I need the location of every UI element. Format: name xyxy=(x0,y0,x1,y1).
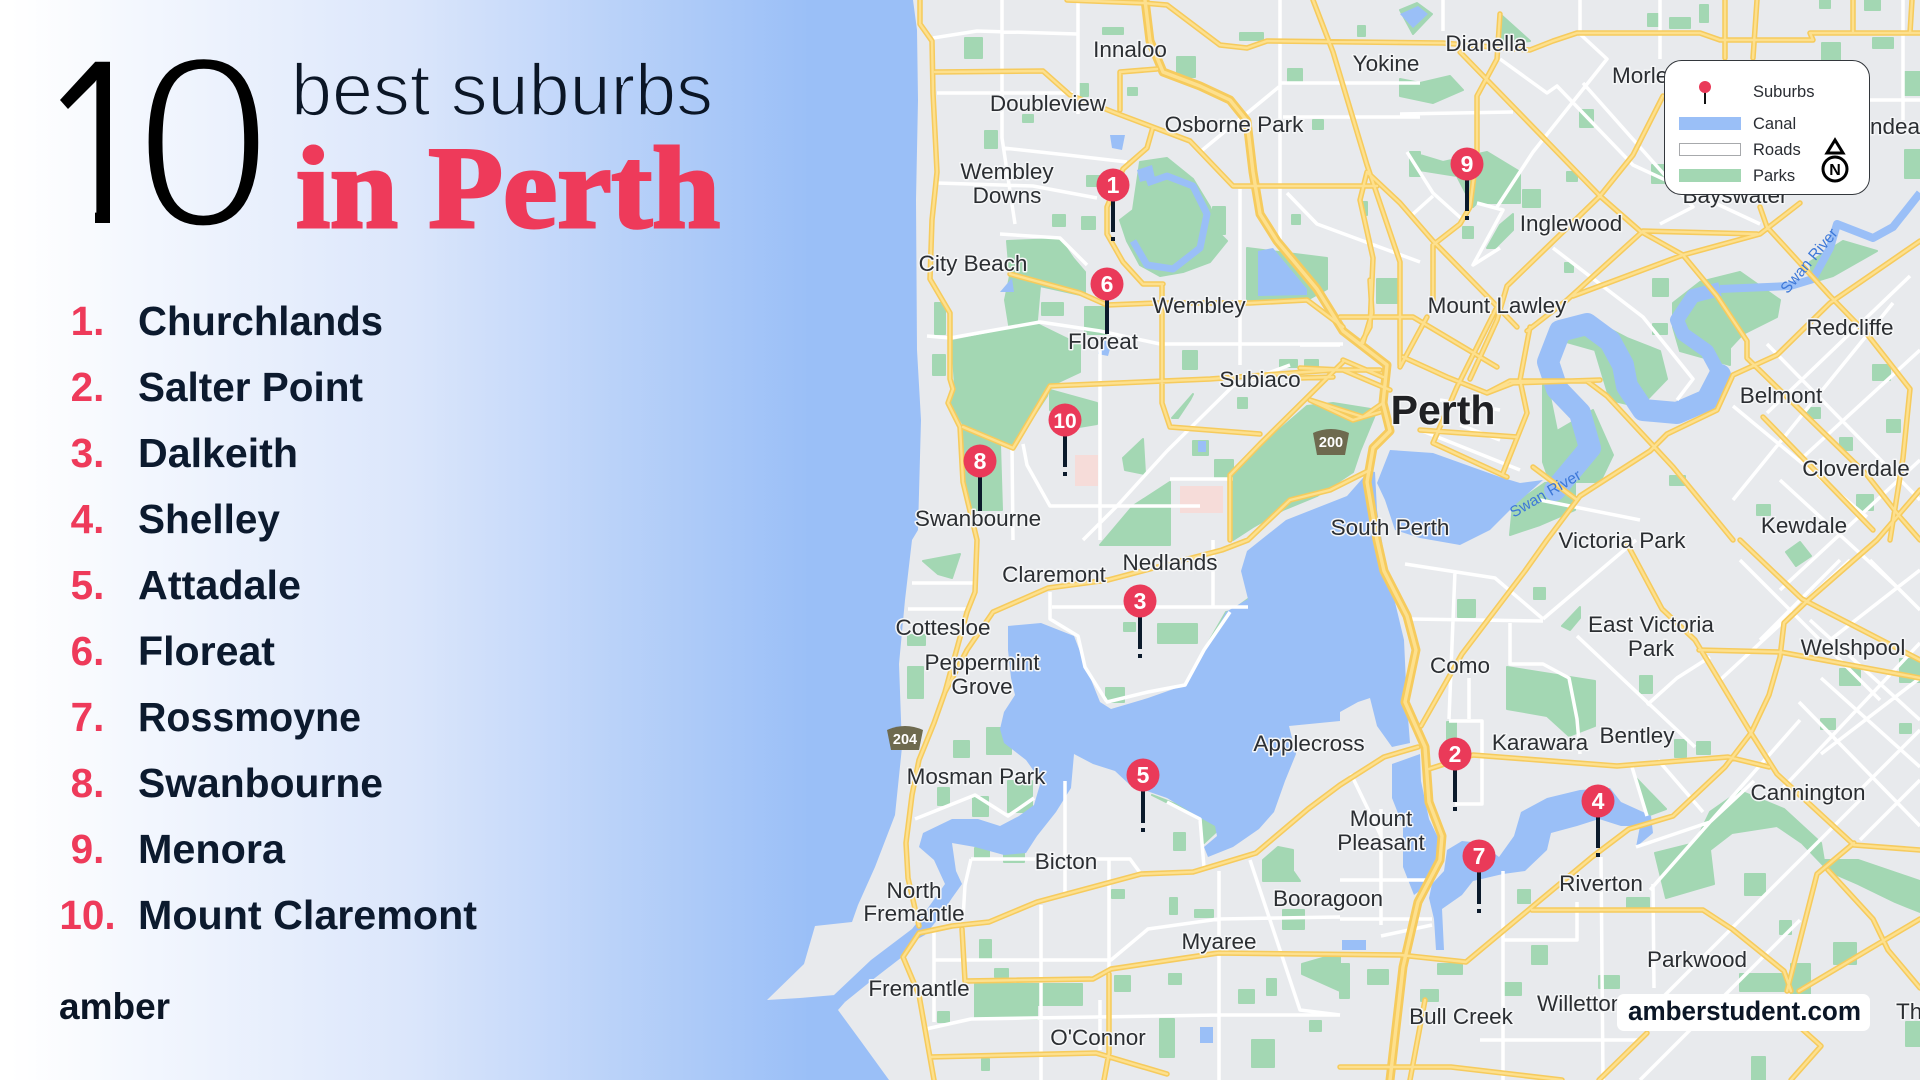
map place labels: Mount Lawley xyxy=(1428,293,1567,318)
pin 3 xyxy=(1124,584,1156,658)
map place labels: Myaree xyxy=(1181,929,1257,954)
legend: roads xyxy=(1680,141,1801,159)
pin 6: 6 xyxy=(1101,271,1113,297)
map place labels: Cloverdale xyxy=(1802,456,1910,481)
title number 10 xyxy=(60,59,258,226)
map place labels: Parkwood xyxy=(1647,947,1747,972)
map place labels: Redcliffe xyxy=(1806,315,1894,340)
map place labels: City Beach xyxy=(919,251,1027,276)
map place labels: Mosman Park xyxy=(907,764,1046,789)
water bodies xyxy=(834,6,1653,1043)
map place labels: Pleasant xyxy=(1337,830,1426,855)
pin 7 xyxy=(1462,840,1496,913)
highway shield 200: 200 xyxy=(1319,435,1343,451)
panel: legend xyxy=(1664,60,1870,194)
map place labels: Floreat xyxy=(1068,329,1139,354)
map place labels: Morley xyxy=(1612,63,1680,88)
legend: parks: Parks xyxy=(1753,167,1795,185)
map place labels: Riverton xyxy=(1559,871,1643,896)
pin 4 xyxy=(1582,784,1614,857)
map place labels: Park xyxy=(1628,636,1675,661)
list item 4 xyxy=(71,496,280,542)
map place labels: Bayswater xyxy=(1682,183,1788,208)
highway shield 204 xyxy=(887,726,923,750)
map place labels: Swanbourne xyxy=(915,506,1041,531)
list item 5: Attadale xyxy=(138,562,301,608)
list item 2: 2. xyxy=(71,364,104,410)
map place labels: Downs xyxy=(973,183,1041,208)
pin 1: 1 xyxy=(1107,172,1120,198)
map place labels: Bentley xyxy=(1599,723,1675,748)
legend: canal: Canal xyxy=(1753,115,1796,133)
pin 2: 2 xyxy=(1449,741,1461,767)
pin 7: 7 xyxy=(1473,843,1485,869)
website tag: amberstudent.com xyxy=(1628,996,1861,1026)
ranked suburb list xyxy=(59,298,477,938)
pin 1 xyxy=(1096,168,1130,241)
parks xyxy=(908,0,1920,1080)
white roads xyxy=(908,0,1920,1080)
map place labels: Cottesloe xyxy=(895,615,991,640)
list item 10: Mount Claremont xyxy=(138,892,477,938)
map place labels: Belmont xyxy=(1740,383,1823,408)
list item 9: Menora xyxy=(138,826,285,872)
map place labels: Cannington xyxy=(1750,780,1866,805)
map place labels: Applecross xyxy=(1253,731,1365,756)
pin 9: 9 xyxy=(1461,151,1473,177)
map place labels: East Victoria xyxy=(1588,612,1714,637)
list item 3 xyxy=(71,430,298,476)
pin 5 xyxy=(1126,758,1160,832)
list item 6: Floreat xyxy=(138,628,275,674)
list item 1: 1. xyxy=(71,298,104,344)
list item 3: Dalkeith xyxy=(138,430,298,476)
north arrow xyxy=(1823,140,1847,181)
legend: suburbs pin: Suburbs xyxy=(1753,83,1814,101)
title: in Perth: in Perth xyxy=(296,124,720,253)
map place labels: Bicton xyxy=(1035,849,1097,874)
list item 7: Rossmoyne xyxy=(138,694,361,740)
brand: amber: amber xyxy=(59,986,170,1027)
map place labels: Grove xyxy=(951,674,1013,699)
map place labels: Doubleview xyxy=(990,91,1107,116)
legend: canal xyxy=(1679,115,1796,133)
map place labels: Dianella xyxy=(1445,31,1527,56)
list item 5: 5. xyxy=(71,562,104,608)
pin 6 xyxy=(1090,268,1124,334)
list item 7: 7. xyxy=(71,694,104,740)
map place labels: Inglewood xyxy=(1520,211,1622,236)
map place labels: Claremont xyxy=(1002,562,1107,587)
map place labels: Mount xyxy=(1350,806,1413,831)
river label lower: Swan River xyxy=(1507,467,1584,521)
map place labels: Kewdale xyxy=(1761,513,1847,538)
north arrow: N xyxy=(1829,162,1841,179)
map place labels: Willetton xyxy=(1537,991,1623,1016)
map place labels: Wembley xyxy=(960,159,1054,184)
title: best suburbs: best suburbs xyxy=(291,50,713,131)
map place labels: Bull Creek xyxy=(1409,1004,1514,1029)
legend: parks xyxy=(1679,167,1795,185)
map place labels: Innaloo xyxy=(1093,37,1167,62)
pin 2 xyxy=(1438,738,1472,811)
map place labels: ndea xyxy=(1870,114,1920,139)
list item 8: 8. xyxy=(71,760,104,806)
map place labels: Osborne Park xyxy=(1165,112,1304,137)
map place labels: Victoria Park xyxy=(1558,528,1686,553)
map place labels: Welshpool xyxy=(1801,635,1905,660)
pin 5: 5 xyxy=(1137,762,1150,788)
map place labels: North xyxy=(886,878,942,903)
map place labels: Karawara xyxy=(1492,730,1589,755)
pin 10: 10 xyxy=(1053,410,1077,433)
title number 10: 1 xyxy=(30,5,167,280)
list item 2: Salter Point xyxy=(138,364,363,410)
highway shield 204: 204 xyxy=(893,732,917,748)
map place labels: Como xyxy=(1430,653,1490,678)
panel: map xyxy=(767,0,1920,1080)
list item 4: 4. xyxy=(71,496,104,542)
list item 1: Churchlands xyxy=(138,298,383,344)
map place labels: Peppermint xyxy=(924,650,1040,675)
map place labels: Wembley xyxy=(1152,293,1246,318)
map place labels xyxy=(863,31,1920,1050)
highway shield 200 xyxy=(1313,429,1349,455)
pin 10 xyxy=(1048,404,1082,476)
list item 6: 6. xyxy=(71,628,104,674)
list item 5 xyxy=(71,562,301,608)
pin 4: 4 xyxy=(1592,788,1605,814)
map place labels: Booragoon xyxy=(1273,886,1383,911)
pin 3: 3 xyxy=(1134,588,1146,614)
river label upper: Swan River xyxy=(1778,225,1842,297)
yellow roads xyxy=(903,0,1920,1080)
list item 9: 9. xyxy=(71,826,104,872)
map place labels: Subiaco xyxy=(1219,367,1301,392)
herdsman lake ring xyxy=(1133,176,1207,269)
pin 8: 8 xyxy=(974,448,987,474)
list item 3: 3. xyxy=(71,430,104,476)
map place labels: Yokine xyxy=(1353,51,1419,76)
list item 8: Swanbourne xyxy=(138,760,383,806)
title number 10: 0 xyxy=(135,5,272,280)
list item 6 xyxy=(71,628,275,674)
list item 10: 10. xyxy=(59,892,116,938)
map place labels: O'Connor xyxy=(1050,1025,1146,1050)
pin 9 xyxy=(1450,148,1484,220)
legend: suburbs pin xyxy=(1699,81,1814,104)
city label: Perth: Perth xyxy=(1391,387,1495,433)
swan river and canning river xyxy=(1548,324,1720,490)
land xyxy=(767,0,1920,1080)
legend: roads: Roads xyxy=(1753,141,1801,159)
map place labels: Fremantle xyxy=(868,976,970,1001)
map place labels: Nedlands xyxy=(1122,550,1218,575)
list item 9 xyxy=(71,826,285,872)
list item 4: Shelley xyxy=(138,496,280,542)
pink precinct areas xyxy=(1075,455,1223,513)
map place labels: South Perth xyxy=(1331,515,1449,540)
map place labels: Fremantle xyxy=(863,901,965,926)
pin 8 xyxy=(964,444,996,511)
